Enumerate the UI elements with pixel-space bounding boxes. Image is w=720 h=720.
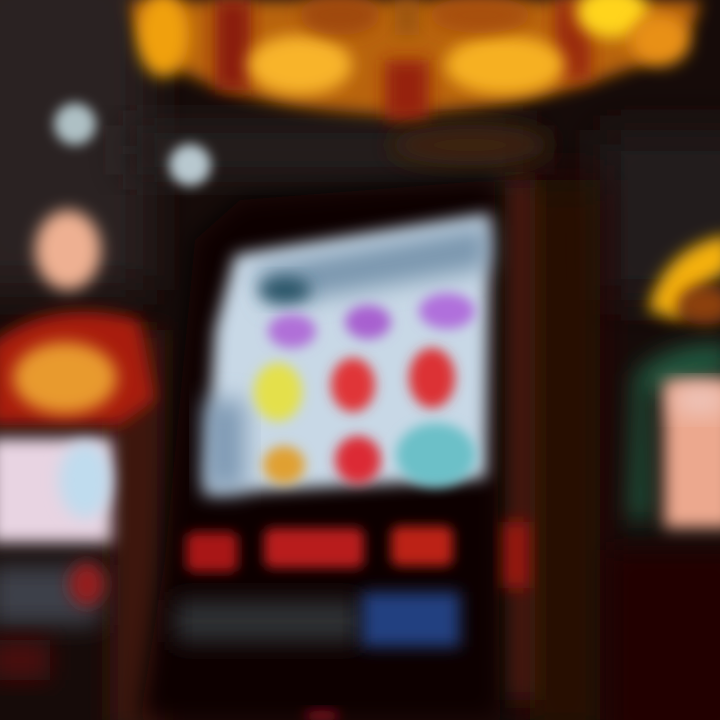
reel symbols: purple row	[268, 293, 475, 348]
screen header band	[255, 225, 488, 305]
icon: ceiling spotlight left	[54, 103, 96, 145]
chandelier: glowing orange ceiling light	[130, 0, 700, 165]
panel: central slot machine	[140, 180, 500, 720]
left machine lower panel	[0, 565, 100, 625]
left machine topper figure	[35, 210, 101, 290]
panel: left slot machine	[0, 210, 155, 680]
lower blue panel	[362, 592, 460, 647]
base red glow	[304, 710, 340, 720]
left machine screen	[0, 438, 112, 543]
right machine pink screen	[664, 380, 720, 528]
screen left edge shade	[205, 400, 245, 490]
right machine green band	[630, 344, 720, 520]
panel: right slot machine	[630, 235, 720, 528]
icon: ceiling spotlight right	[169, 144, 211, 186]
machine black frame	[140, 180, 500, 720]
reel symbols: middle row	[254, 348, 455, 421]
machine screen	[205, 214, 490, 494]
left machine red dome	[0, 312, 155, 425]
right machine yellow arc	[648, 235, 720, 320]
lower panel	[175, 600, 360, 642]
left machine orange emblem	[13, 342, 117, 414]
reel symbols: bottom row	[263, 423, 476, 487]
side red light strip	[503, 522, 529, 588]
red buttons	[186, 526, 453, 572]
